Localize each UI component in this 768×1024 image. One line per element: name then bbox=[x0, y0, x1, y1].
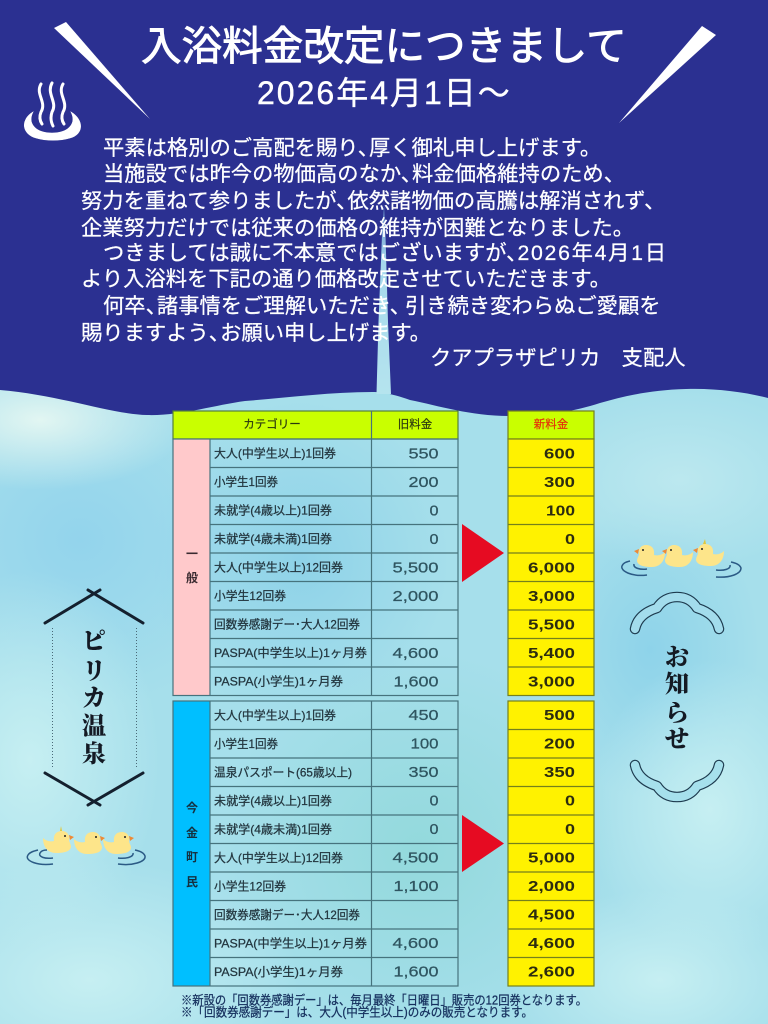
footnotes: ※「回数券感謝デー」は、大人(中学生以上)のみの販売となります。 bbox=[181, 1004, 533, 1020]
icon: left rubber ducks bbox=[27, 826, 145, 865]
left white spike bbox=[54, 22, 150, 119]
panel: general new prices bbox=[508, 439, 594, 696]
greeting text block: 企業努力だけでは従来の価格の維持が困難となりました。 bbox=[81, 216, 634, 240]
panel: general category: 0 bbox=[430, 531, 438, 548]
title: 入浴料金改定につきまして bbox=[141, 23, 627, 69]
panel: town residents category: 1,100 bbox=[394, 878, 438, 895]
panel: town residents category: 4,600 bbox=[392, 935, 438, 952]
greeting text block: 努力を重ねて参りましたが、依然諸物価の高騰は解消されず、 bbox=[81, 189, 665, 213]
panel: town residents category bbox=[173, 701, 458, 986]
panel: general new prices: 600 bbox=[544, 446, 575, 462]
panel: town residents new prices: 500 bbox=[544, 707, 575, 724]
icon: right rubber ducks bbox=[622, 539, 741, 577]
panel: town residents category: 回数券感謝デー･大人12回券 bbox=[214, 908, 360, 922]
panel: notice sign bbox=[635, 597, 719, 797]
hot spring water spout bbox=[376, 205, 391, 394]
panel: town residents category: 100 bbox=[410, 736, 438, 752]
panel: town residents category: 大人(中学生以上)1回券 bbox=[214, 708, 336, 722]
panel: general category: 4,600 bbox=[392, 645, 438, 662]
panel: town residents category: 今 bbox=[186, 800, 198, 815]
greeting text block: より入浴料を下記の通り価格改定させていただきます。 bbox=[81, 267, 611, 291]
arrow: town residents price change bbox=[462, 815, 504, 872]
greeting text block: クアプラザピリカ 支配人 bbox=[430, 346, 686, 370]
greeting text block: つきましては誠に不本意ではございますが、2026年4月1日 bbox=[103, 240, 668, 265]
panel: town residents new prices: 0 bbox=[565, 792, 575, 810]
table header: カテゴリー bbox=[243, 417, 301, 431]
panel: general category: 大人(中学生以上)1回券 bbox=[214, 446, 336, 460]
panel: town residents category: 0 bbox=[430, 821, 438, 838]
panel: Pirika onsen sign bbox=[45, 590, 143, 805]
panel: general category: 大人(中学生以上)12回券 bbox=[214, 560, 343, 574]
panel: general category: 5,500 bbox=[392, 560, 438, 576]
panel: general category: 0 bbox=[430, 502, 438, 520]
panel: general category: 2,000 bbox=[392, 588, 438, 605]
panel: general category: PASPA(中学生以上)1ヶ月券 bbox=[214, 646, 367, 660]
greeting text block: 当施設では昨今の物価高のなか、料金価格維持のため、 bbox=[103, 162, 625, 186]
panel: town residents new prices: 0 bbox=[565, 821, 575, 838]
table header: 新料金 bbox=[534, 417, 569, 431]
subtitle: effective date: 2026年4月1日～ bbox=[257, 75, 512, 111]
panel: town residents category: 0 bbox=[430, 792, 438, 810]
fee table bbox=[173, 411, 594, 986]
panel: town residents category: PASPA(小学生)1ヶ月券 bbox=[214, 965, 343, 979]
panel: general category: 小学生1回券 bbox=[214, 475, 278, 489]
panel: general new prices: 5,500 bbox=[528, 616, 575, 634]
panel: general category: 200 bbox=[408, 474, 438, 491]
panel: general new prices: 6,000 bbox=[528, 560, 575, 576]
greeting text block: 何卒、諸事情をご理解いただき、引き続き変わらぬご愛顧を bbox=[103, 294, 661, 318]
panel: town residents category: 町 bbox=[186, 850, 198, 864]
panel: general new prices: 3,000 bbox=[528, 588, 575, 605]
panel: general new prices: 300 bbox=[544, 474, 575, 491]
panel: town residents new prices: 2,600 bbox=[528, 964, 575, 980]
panel: general category: 回数券感謝デー･大人12回券 bbox=[214, 618, 360, 632]
panel: town residents category: PASPA(中学生以上)1ヶ月券 bbox=[214, 936, 367, 950]
panel: town residents new prices: 4,600 bbox=[528, 935, 575, 952]
arrow: general price change bbox=[462, 524, 504, 582]
panel: general category: 1,600 bbox=[394, 674, 438, 690]
panel: town residents new prices: 5,000 bbox=[528, 850, 575, 866]
panel: town residents category: 未就学(4歳未満)1回券 bbox=[214, 822, 332, 836]
panel: town residents category: 民 bbox=[186, 875, 198, 889]
panel: town residents category: 温泉パスポート(65歳以上) bbox=[214, 766, 352, 780]
panel: general new prices: 100 bbox=[546, 502, 575, 520]
panel: general new prices: 0 bbox=[565, 531, 575, 548]
panel: general category bbox=[173, 439, 458, 696]
panel: town residents new prices: 4,500 bbox=[528, 906, 575, 924]
panel: general new prices: 5,400 bbox=[528, 645, 575, 662]
right white spike bbox=[619, 26, 716, 123]
icon: onsen symbol bbox=[24, 83, 81, 140]
panel: general category: 小学生12回券 bbox=[214, 589, 286, 603]
table header bbox=[173, 411, 594, 439]
panel: town residents category: 1,600 bbox=[394, 964, 438, 980]
panel: town residents category: 4,500 bbox=[392, 850, 438, 866]
footnotes bbox=[181, 992, 587, 1020]
panel: general category: 未就学(4歳未満)1回券 bbox=[214, 532, 332, 546]
greeting text block bbox=[81, 136, 686, 370]
panel: town residents new prices: 2,000 bbox=[528, 878, 575, 895]
greeting text block: 平素は格別のご高配を賜り、厚く御礼申し上げます。 bbox=[103, 136, 601, 160]
panel: notice sign: お知らせ bbox=[665, 645, 689, 753]
panel: Pirika onsen sign: ピリカ温泉 bbox=[82, 629, 106, 768]
panel: town residents category: 未就学(4歳以上)1回券 bbox=[214, 794, 332, 808]
panel: general category: PASPA(小学生)1ヶ月券 bbox=[214, 674, 343, 688]
panel: town residents new prices: 350 bbox=[544, 764, 575, 781]
greeting text block: 賜りますよう、お願い申し上げます。 bbox=[81, 321, 431, 345]
panel: town residents category: 金 bbox=[186, 825, 198, 840]
panel: general category: 一 bbox=[186, 547, 198, 561]
panel: general category: 未就学(4歳以上)1回券 bbox=[214, 504, 332, 518]
panel: town residents category: 小学生1回券 bbox=[214, 737, 278, 751]
navy wave header band bbox=[0, 0, 768, 416]
panel: town residents category: 小学生12回券 bbox=[214, 880, 286, 894]
panel: town residents category: 350 bbox=[408, 764, 438, 781]
panel: general new prices: 3,000 bbox=[528, 674, 575, 690]
panel: general category: 般 bbox=[186, 570, 198, 585]
footnotes: ※新設の「回数券感謝デー」は、毎月最終「日曜日」販売の12回券となります。 bbox=[181, 992, 587, 1008]
panel: town residents category: 450 bbox=[408, 707, 438, 724]
panel: town residents category: 大人(中学生以上)12回券 bbox=[214, 851, 343, 865]
panel: general category: 550 bbox=[408, 446, 438, 462]
table header: 旧料金 bbox=[398, 417, 433, 431]
panel: town residents new prices bbox=[508, 701, 594, 986]
panel: town residents new prices: 200 bbox=[544, 736, 575, 752]
